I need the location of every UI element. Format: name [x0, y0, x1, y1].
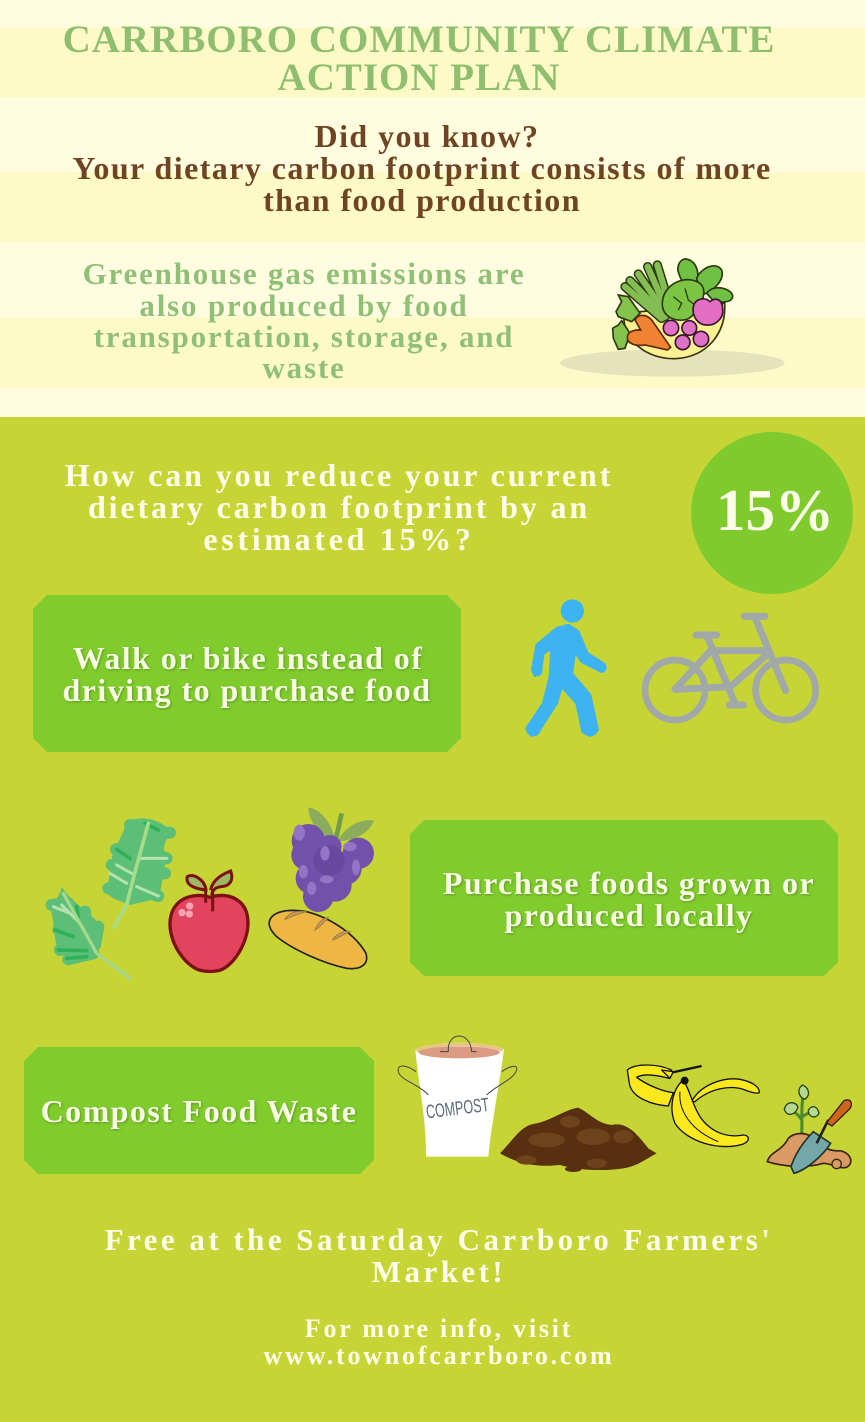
panel: compost: [24, 1047, 374, 1174]
greenhouse gas text: transportation, storage, and: [94, 319, 514, 354]
icon: bicycle: [645, 616, 816, 720]
icon: apple: [170, 871, 248, 971]
icon: trowel with seedling: [767, 1085, 851, 1173]
more info text: www.townofcarrboro.com: [264, 1341, 614, 1370]
panel: purchase local: [410, 820, 838, 976]
panel: compost: Compost Food Waste: [41, 1093, 357, 1129]
icon: compost bucket: [398, 1036, 517, 1157]
title: CARRBORO COMMUNITY CLIMATE: [63, 18, 775, 61]
did you know text: Did you know?: [315, 118, 539, 154]
question text: dietary carbon footprint by an: [88, 489, 590, 525]
panel: purchase local: produced locally: [505, 897, 753, 933]
icon: soil pile: [500, 1108, 657, 1172]
green lower background: [0, 417, 865, 1422]
panel: walk or bike: driving to purchase food: [63, 672, 431, 708]
15% circle callout: 15%: [716, 477, 834, 543]
more info text: [264, 1314, 614, 1370]
icon: leafy greens: [50, 818, 172, 978]
greenhouse gas text: also produced by food: [139, 288, 469, 323]
did you know text: than food production: [263, 182, 581, 218]
question text: [65, 457, 613, 557]
farmers market text: Market!: [372, 1254, 506, 1289]
greenhouse gas text: [83, 256, 525, 385]
greenhouse gas text: waste: [262, 350, 346, 385]
farmers market text: Free at the Saturday Carrboro Farmers': [105, 1222, 773, 1257]
icon: walking person: [526, 599, 607, 736]
cream striped header background: [0, 0, 865, 417]
panel: purchase local: Purchase foods grown or: [443, 865, 815, 901]
question text: estimated 15%?: [203, 521, 475, 557]
icon: banana peel: [627, 1065, 759, 1147]
icon: grapes: [291, 807, 374, 912]
icon: bread loaf: [269, 910, 367, 969]
title: [63, 18, 775, 99]
more info text: For more info, visit: [305, 1314, 573, 1343]
did you know text: [72, 118, 772, 218]
question text: How can you reduce your current: [65, 457, 613, 493]
panel: walk or bike: Walk or bike instead of: [73, 640, 423, 676]
icon: vegetable bowl: [560, 259, 785, 377]
icon: compost bucket: COMPOST: [425, 1095, 490, 1123]
greenhouse gas text: Greenhouse gas emissions are: [83, 256, 525, 291]
farmers market text: [105, 1222, 773, 1289]
did you know text: Your dietary carbon footprint consists of more: [72, 150, 772, 186]
panel: walk or bike: [33, 595, 461, 752]
15% circle callout: [691, 432, 853, 594]
title: ACTION PLAN: [278, 56, 560, 99]
